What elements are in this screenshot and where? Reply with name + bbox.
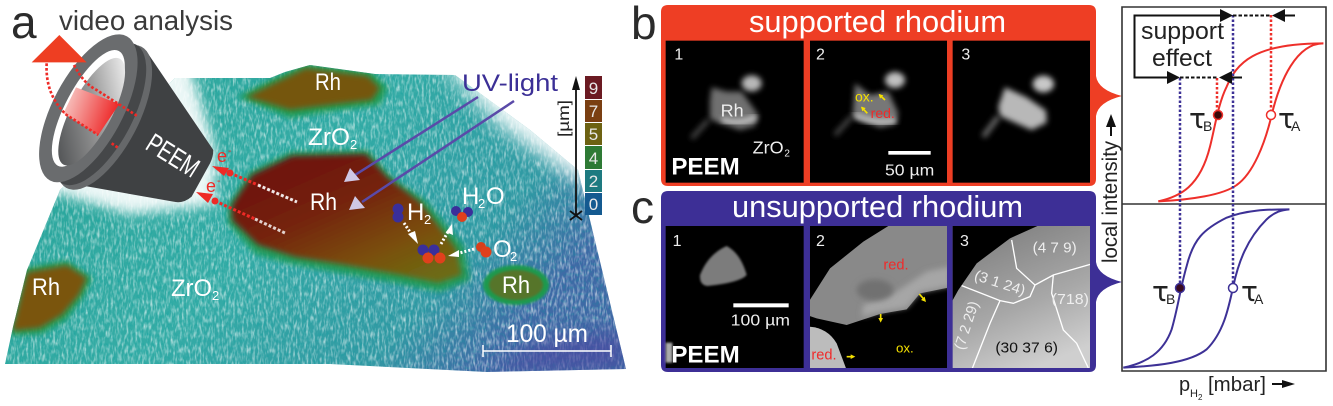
frame b3: [953, 41, 1090, 183]
support effect arrows: [1134, 9, 1295, 84]
tau markers: τ: [1152, 275, 1169, 308]
frame b3: 3: [961, 46, 970, 63]
frame c3: (7 2 29): [952, 299, 983, 352]
front ring: [19, 20, 158, 197]
reaction molecules: 2: [478, 196, 485, 211]
rotation arrow: [32, 35, 87, 62]
reaction molecules: [392, 183, 517, 264]
red beam: [63, 87, 119, 135]
tau markers: B: [1166, 291, 1175, 307]
scale bar: 100 µm: [483, 320, 611, 357]
reaction molecules: 2: [510, 249, 517, 264]
frame b1: 1: [674, 46, 683, 63]
reaction molecules: H: [407, 199, 424, 226]
frame c2: [807, 223, 950, 370]
surface labels: [32, 69, 530, 303]
frame b1: PEEM: [671, 153, 740, 180]
blue hysteresis loop: [1123, 209, 1289, 368]
chart frame: [1122, 7, 1326, 371]
surface labels: Rh: [315, 69, 341, 96]
x axis label: p: [1179, 374, 1190, 396]
surface labels: 2: [212, 288, 219, 303]
frame b2: [810, 41, 947, 183]
frame c1: [666, 226, 804, 368]
surface labels: Rh: [32, 274, 60, 301]
label: support effect: support: [1141, 18, 1224, 45]
tau markers: τ: [1278, 102, 1295, 135]
tau markers: τ: [1189, 102, 1206, 135]
emitted electrons: e: [217, 146, 227, 166]
height scale legend: 5: [589, 125, 598, 144]
chart: hysteresis curves: [1099, 7, 1326, 402]
dotted guides: [1180, 15, 1271, 288]
panel b: supported rhodium: [661, 4, 1122, 186]
x axis label: H: [1190, 388, 1198, 400]
tau markers: [1152, 102, 1301, 308]
tau markers: A: [1254, 291, 1264, 307]
zirconia surface: [0, 60, 630, 375]
Rh island: right: [483, 265, 549, 305]
tau markers: τ: [1241, 275, 1258, 308]
y axis label: local intensity: [1099, 141, 1122, 263]
frame c3: (3 1 24): [972, 268, 1027, 299]
panel a: 3D topography surface: [0, 60, 640, 375]
frame c3: 3: [960, 233, 969, 250]
Rh island: top: [238, 64, 388, 118]
red hysteresis loop: [1158, 43, 1323, 201]
height scale legend: 7: [589, 102, 598, 121]
surface labels: Rh: [502, 272, 530, 299]
emitted electrons: -: [217, 176, 220, 187]
surface labels: ZrO: [308, 124, 350, 151]
lens glass: [46, 49, 138, 174]
frame c3: (30 37 6): [995, 341, 1058, 357]
Rh island: left: [10, 261, 92, 336]
emitted electrons: [196, 146, 297, 233]
cone body: [70, 52, 213, 202]
frame c2: 2: [816, 233, 825, 250]
x axis label: [mbar]: [1208, 374, 1266, 396]
scale bar: 100 µm: 100 µm: [506, 320, 588, 348]
frame b1: Rh: [721, 101, 744, 121]
frame c2: ox.: [896, 341, 914, 356]
x axis label: 2: [1198, 393, 1203, 402]
frame c1: 1: [673, 233, 682, 250]
heading: video analysis: video analysis: [59, 5, 233, 36]
tau markers: B: [1203, 118, 1212, 134]
letter c: c: [631, 181, 654, 233]
frame c3: [950, 223, 1092, 370]
reaction molecules: O: [493, 236, 512, 263]
icon: PEEM objective lens: [19, 20, 213, 204]
height scale legend: 4: [589, 149, 598, 168]
heading: unsupported rhodium: [732, 189, 1023, 224]
emitted electrons: -: [228, 146, 231, 157]
frame b1: ZrO: [753, 137, 784, 157]
frame b2: 50 µm: [885, 162, 934, 179]
UV light label and arrows: UV-light: [462, 70, 558, 97]
frame b1: [666, 41, 804, 183]
frame b2: red.: [871, 105, 895, 121]
frame c3: (4 7 9): [1033, 241, 1077, 257]
frame c1: PEEM: [671, 341, 740, 368]
reaction molecules: 2: [424, 212, 431, 227]
PEEM label: PEEM: [141, 127, 205, 183]
tau markers: A: [1291, 118, 1301, 134]
frame c2: red.: [811, 347, 837, 363]
height scale legend: 2: [589, 172, 598, 191]
height scale legend: [556, 76, 602, 220]
heading: supported rhodium: [749, 4, 1006, 39]
reaction molecules: O: [486, 183, 505, 210]
UV light label and arrows: [344, 70, 558, 210]
emitted electrons: e: [206, 176, 216, 196]
surface labels: 2: [350, 137, 357, 152]
frame b1: 2: [784, 149, 790, 160]
surface labels: Rh: [310, 189, 337, 216]
frame b2: 2: [816, 46, 825, 63]
x axis label: [1179, 374, 1295, 402]
surface labels: ZrO: [171, 275, 212, 302]
label: support effect: effect: [1152, 45, 1212, 72]
frame c1: 100 µm: [731, 312, 790, 329]
frame b2: ox.: [855, 89, 874, 105]
height scale legend: [µm]: [556, 100, 573, 137]
panel c: unsupported rhodium: [661, 189, 1122, 372]
Rh island: central: [228, 150, 470, 292]
frame c2: red.: [883, 257, 909, 273]
label: support effect: [1141, 18, 1224, 72]
height scale legend: 0: [589, 195, 598, 214]
frame c3: (718): [1052, 292, 1089, 308]
height scale legend: 9: [589, 79, 598, 98]
reaction molecules: H: [462, 183, 479, 210]
